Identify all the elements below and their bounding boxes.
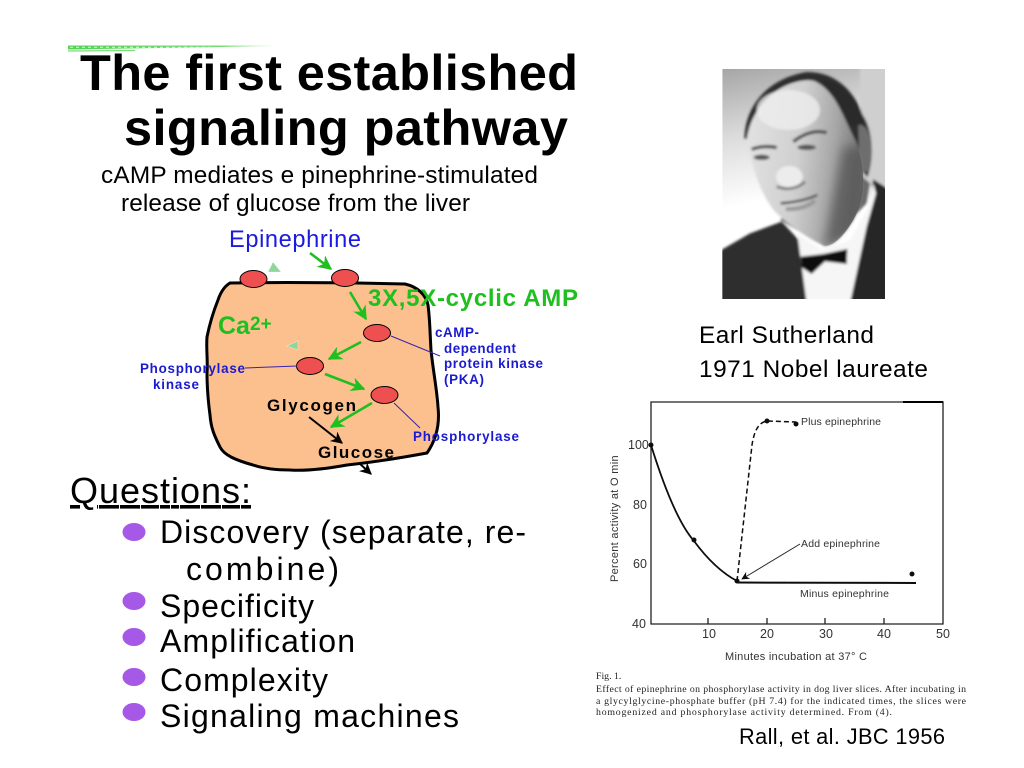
ear [858,125,871,172]
black arrows [309,417,371,474]
blue leader lines [245,336,440,428]
caption: name [699,322,928,383]
y axis numbers: 40 [632,617,646,631]
y axis numbers: 80 [633,498,647,512]
item: signaling machines: Signaling machines [160,698,459,734]
axis ticks [708,618,884,624]
subtitle text [101,162,538,217]
label: cyclic AMP: 3X,5X-cyclic AMP [368,285,578,312]
x axis numbers: 30 [819,627,833,641]
label: PKA: protein kinase [444,356,543,371]
hair [744,72,872,177]
annotation arrow [742,544,800,579]
label: PKA: cAMP- [435,325,479,340]
item: discovery continued: combine) [186,551,339,587]
questions heading: Questions: [70,470,251,511]
label: phosphorylase kinase [140,361,245,392]
label: calcium: 2+ [250,314,272,335]
receptor: right [332,270,358,286]
caption: name: Earl Sutherland [699,322,874,349]
x axis numbers: 20 [760,627,774,641]
series labels: Minus epinephrine [800,588,889,600]
item: amplification: Amplification [160,623,355,659]
shirt [797,183,876,303]
suit [717,222,808,303]
forehead highlight [757,90,820,130]
figure caption [596,671,967,718]
x axis numbers: 50 [936,627,950,641]
right background [858,69,885,188]
enzyme: PKA [364,324,390,342]
bullet 1 [122,523,146,541]
portrait photo [717,63,890,303]
y axis title: Percent activity at O min [609,455,621,582]
series labels [800,416,889,600]
label: PKA [435,325,543,387]
title [80,44,578,156]
question list [122,514,526,734]
citation: Rall, et al. JBC 1956 [739,724,945,749]
nose [776,166,803,187]
curve: minus epinephrine [651,445,737,581]
item: complexity: Complexity [160,662,328,698]
small green ligand marks [268,262,298,350]
bullet 2 [122,592,146,610]
eyebrows [752,132,827,149]
curve: plus epinephrine [737,421,796,581]
y axis numbers: 100 [628,438,649,452]
bow tie [801,249,847,274]
face [747,81,863,246]
figure caption: Effect of epinephrine on phosphorylase activity in dog liver slices. After incubating in [596,684,966,695]
enzyme: phosphorylase kinase [296,358,324,374]
enzyme: phosphorylase [371,386,398,404]
cell body [207,283,439,470]
label: PKA: (PKA) [444,372,484,387]
figure caption: a glycylglycine-phosphate buffer (pH 7.4) for the indicated times, the slices were [596,696,967,707]
label: glucose: Glucose [318,443,394,462]
x axis title: Minutes incubation at 37° C [725,651,867,663]
label: phosphorylase kinase: kinase [153,377,199,392]
label: glycogen: Glycogen [267,396,356,415]
subtitle text: cAMP mediates e pinephrine-stimulated [101,162,538,189]
subtitle text: release of glucose from the liver [121,190,470,217]
chart frame [651,402,943,624]
pathway diagram [140,227,578,474]
label: phosphorylase kinase: Phosphorylase [140,361,245,376]
bullet 4 [122,668,146,686]
bullet 5 [122,703,146,721]
caption: name: 1971 Nobel laureate [699,356,928,383]
series labels: Add epinephrine [801,538,880,550]
receptor: left [240,270,267,288]
y axis numbers [628,438,649,631]
y axis numbers: 60 [633,557,647,571]
bullet 3 [122,628,146,646]
label: calcium: Ca [218,312,250,340]
title: signaling pathway [124,99,568,156]
decorative green rule [68,46,272,51]
figure caption: homogenized and phosphorylase activity determined. From (4). [596,707,892,718]
green arrows [310,253,372,427]
item: specificity: Specificity [160,588,314,624]
x axis numbers: 10 [702,627,716,641]
item: discovery: Discovery (separate, re- [160,514,526,550]
title: The first established [80,44,578,101]
label: PKA: dependent [444,341,517,356]
x axis numbers [702,627,950,641]
data points [648,418,914,584]
face side shadow [823,147,870,250]
eyes [754,155,770,160]
line chart [609,402,950,663]
label: epinephrine: Epinephrine [229,227,361,253]
series labels: Plus epinephrine [801,416,881,428]
figure caption: Fig. 1. [596,671,621,682]
x axis numbers: 40 [877,627,891,641]
neck shadow [779,177,872,247]
label: phosphorylase: Phosphorylase [413,429,519,444]
mouth [781,195,817,203]
